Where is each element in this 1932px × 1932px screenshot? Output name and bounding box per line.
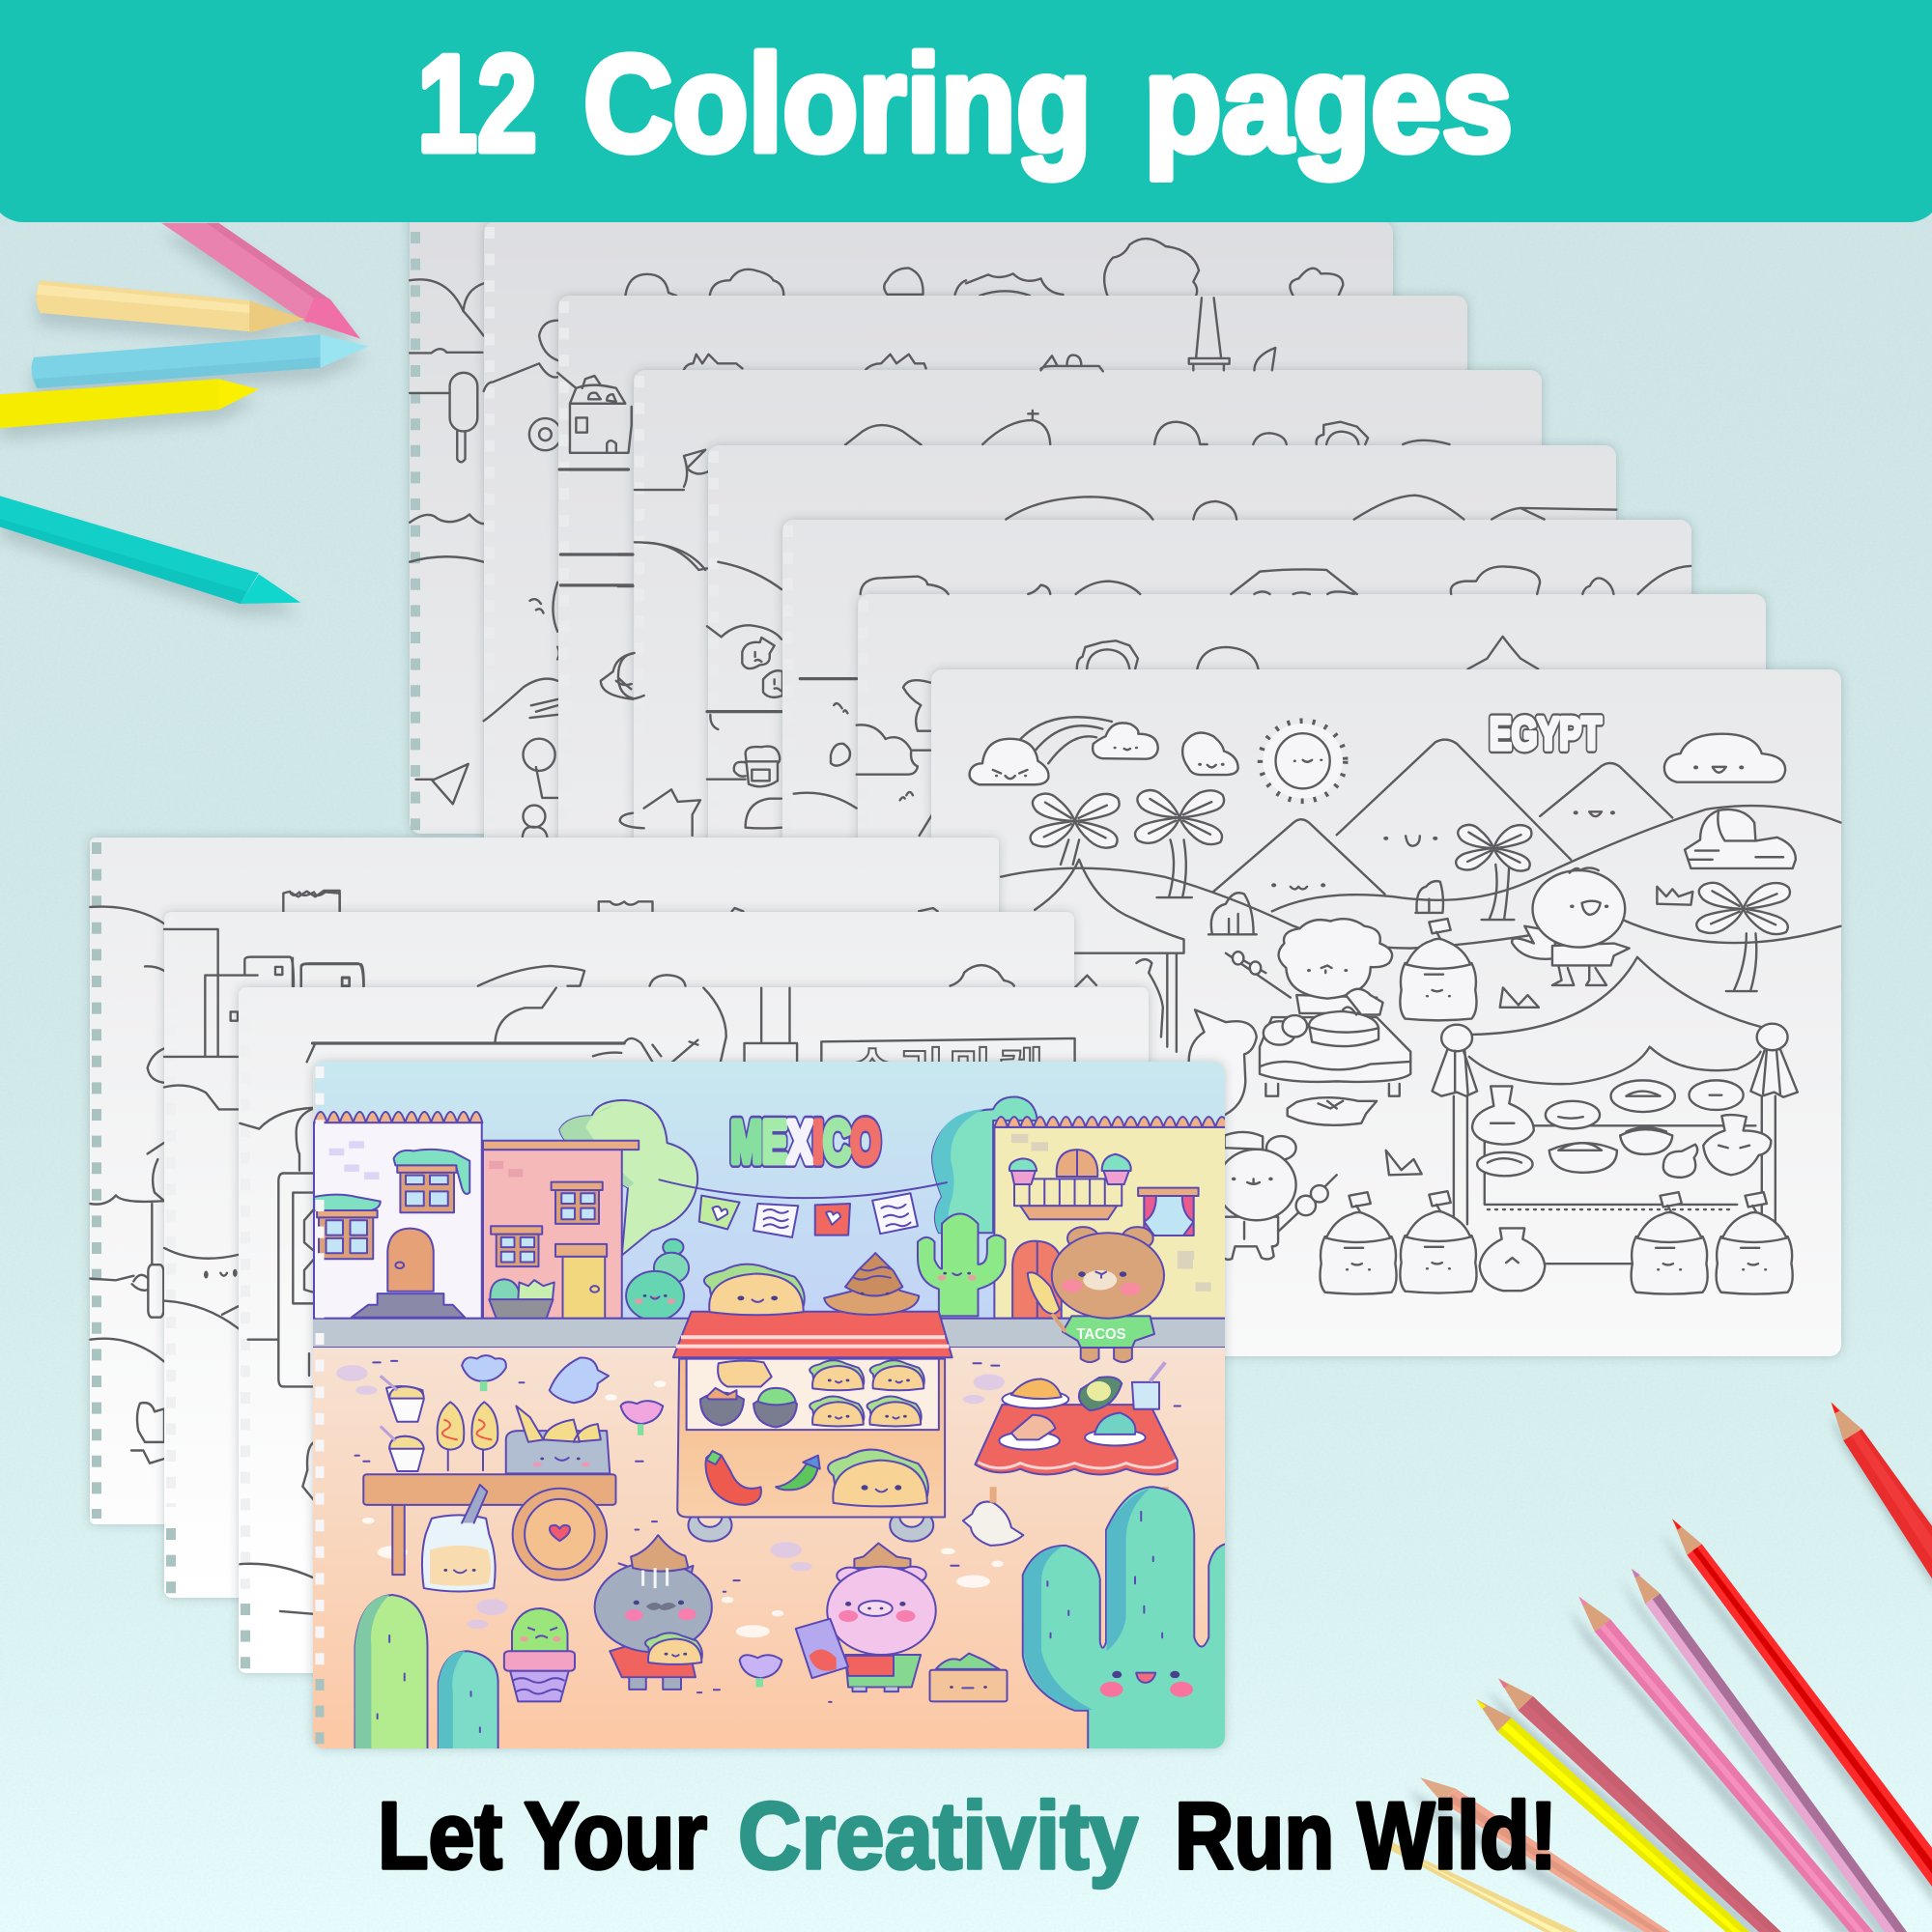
Egypt: bear chef [1217, 1132, 1337, 1260]
Mexico: ground [308, 1348, 1232, 1754]
Egypt: pots and food on stall [1472, 1080, 1771, 1178]
crayon: teal [0, 496, 300, 604]
Korean market sign: 수리마켓 [850, 1044, 1043, 1098]
Mexico: round cacti [626, 1239, 689, 1321]
slogan: Let Your [378, 1782, 707, 1889]
Mexico: taco and hat on stand roof [704, 1253, 919, 1315]
pencil: cream [1389, 1840, 1577, 1932]
Mexico: food table right [975, 1362, 1178, 1503]
Egypt: bushes and grass [1208, 881, 1692, 1175]
Egypt: sphinx [1685, 810, 1796, 868]
crayon: blue [32, 334, 368, 388]
lower sheet 3 [239, 987, 1149, 1673]
Egypt: table with dishes [1260, 1008, 1410, 1125]
pencil: red [1672, 1519, 1932, 1887]
slogan: Run Wild! [1175, 1782, 1557, 1889]
title: 12 [417, 27, 537, 181]
Mexico: teal tree [932, 1097, 1037, 1233]
Mexico: title [729, 1115, 883, 1169]
sheet 8: Egypt page [931, 637, 1841, 1356]
Mexico: juice jar [422, 1485, 496, 1592]
header bar [0, 0, 1932, 222]
sheet 5 [707, 411, 1616, 1132]
Mexico: green tree [559, 1100, 697, 1256]
Mexico: sidewalk [308, 1319, 1232, 1348]
Mexico: bottom left cacti [355, 1595, 498, 1759]
Mexico: bear with corn [1028, 1227, 1164, 1362]
Mexico: pink house [483, 1141, 639, 1319]
pencil: yellow [1476, 1699, 1749, 1932]
title: pages [1144, 27, 1513, 181]
Egypt: palms [1031, 790, 1790, 991]
crayon shadows [0, 236, 368, 616]
Mexico: cat with taco [595, 1535, 712, 1690]
slogan [378, 1782, 1557, 1889]
Mexico: bunting [659, 1179, 947, 1237]
crayons, top left [0, 223, 368, 616]
pencil shadows [1407, 1415, 1932, 1932]
crayon: cream [36, 280, 305, 332]
Egypt: chick [1512, 867, 1630, 985]
sheet 1 [410, 147, 1319, 834]
Mexico: pig with bag [796, 1544, 936, 1691]
Egypt: hills [1001, 806, 1840, 949]
Egypt: right cloud [1664, 734, 1785, 782]
Mexico: white spots [362, 1380, 1004, 1637]
lower sheet 2 [164, 912, 1074, 1598]
sheet 4 [618, 298, 1542, 1057]
Egypt: sack with stick [1400, 919, 1476, 1020]
sheet 3 [557, 296, 1467, 982]
pencil: rose [1498, 1679, 1781, 1932]
Egypt: market stall [1433, 957, 1798, 1264]
pencil: lilac [1632, 1569, 1907, 1932]
Egypt: pyramids [1213, 740, 1672, 895]
Egypt: left tent behind cards [1035, 860, 1184, 1052]
Egypt: title text [1490, 709, 1602, 759]
Mexico: corn table with wheel [363, 1402, 616, 1580]
Mexico: spiral holes [315, 1066, 325, 1676]
Egypt: sacks and vase at bottom [1320, 1191, 1793, 1294]
Egypt: title text: EGYPT [1490, 709, 1602, 759]
Mexico: bear with corn: TACOS [1076, 1325, 1126, 1343]
Mexico: title: MEXICO [730, 1109, 880, 1176]
Egypt: rainbow and left clouds [970, 717, 1728, 784]
Mexico: ground spots [336, 1365, 1005, 1629]
Egypt: title text: EGYPT [1490, 709, 1602, 759]
crayon: yellow [0, 379, 259, 428]
Mexico: potted cactus [504, 1608, 575, 1701]
colored pencils, bottom right [1389, 1403, 1932, 1932]
sheet 6 [782, 496, 1691, 1207]
Mexico: white house [314, 1112, 482, 1319]
pencil: pink [1578, 1597, 1874, 1932]
lower sheet 1 [90, 838, 999, 1524]
Mexico colored page: MEXICO [730, 1109, 880, 1176]
Mexico: ground dashes [355, 1361, 1180, 1702]
Mexico: big smiling cactus [1023, 1487, 1250, 1759]
Egypt: sun [1261, 722, 1345, 801]
slogan: Creativity [738, 1782, 1138, 1889]
Egypt: sheep chef [1226, 919, 1392, 1015]
sheet 2 [484, 221, 1393, 908]
title: Coloring [583, 27, 1092, 181]
Mexico: tall cactus [918, 1213, 1006, 1316]
Mexico: taco box [929, 1654, 1007, 1701]
back stack of coloring pages [410, 147, 1841, 1356]
Mexico: sky [314, 1061, 1226, 1320]
title [417, 27, 1513, 181]
pencil: red far [1832, 1403, 1932, 1578]
Mexico: ice cream cups [381, 1376, 424, 1471]
Mexico: flowers and birds [462, 1355, 1023, 1687]
Mexico colored page [308, 1061, 1250, 1759]
pencil: peach [1420, 1777, 1670, 1932]
crayon: pink [161, 223, 360, 339]
Mexico: yellow house [994, 1117, 1229, 1319]
Egypt: jug behind card [1189, 1009, 1257, 1116]
front stack of coloring pages [90, 838, 1250, 1759]
Mexico: taco stand [673, 1312, 952, 1542]
sheet 7 [857, 566, 1766, 1281]
